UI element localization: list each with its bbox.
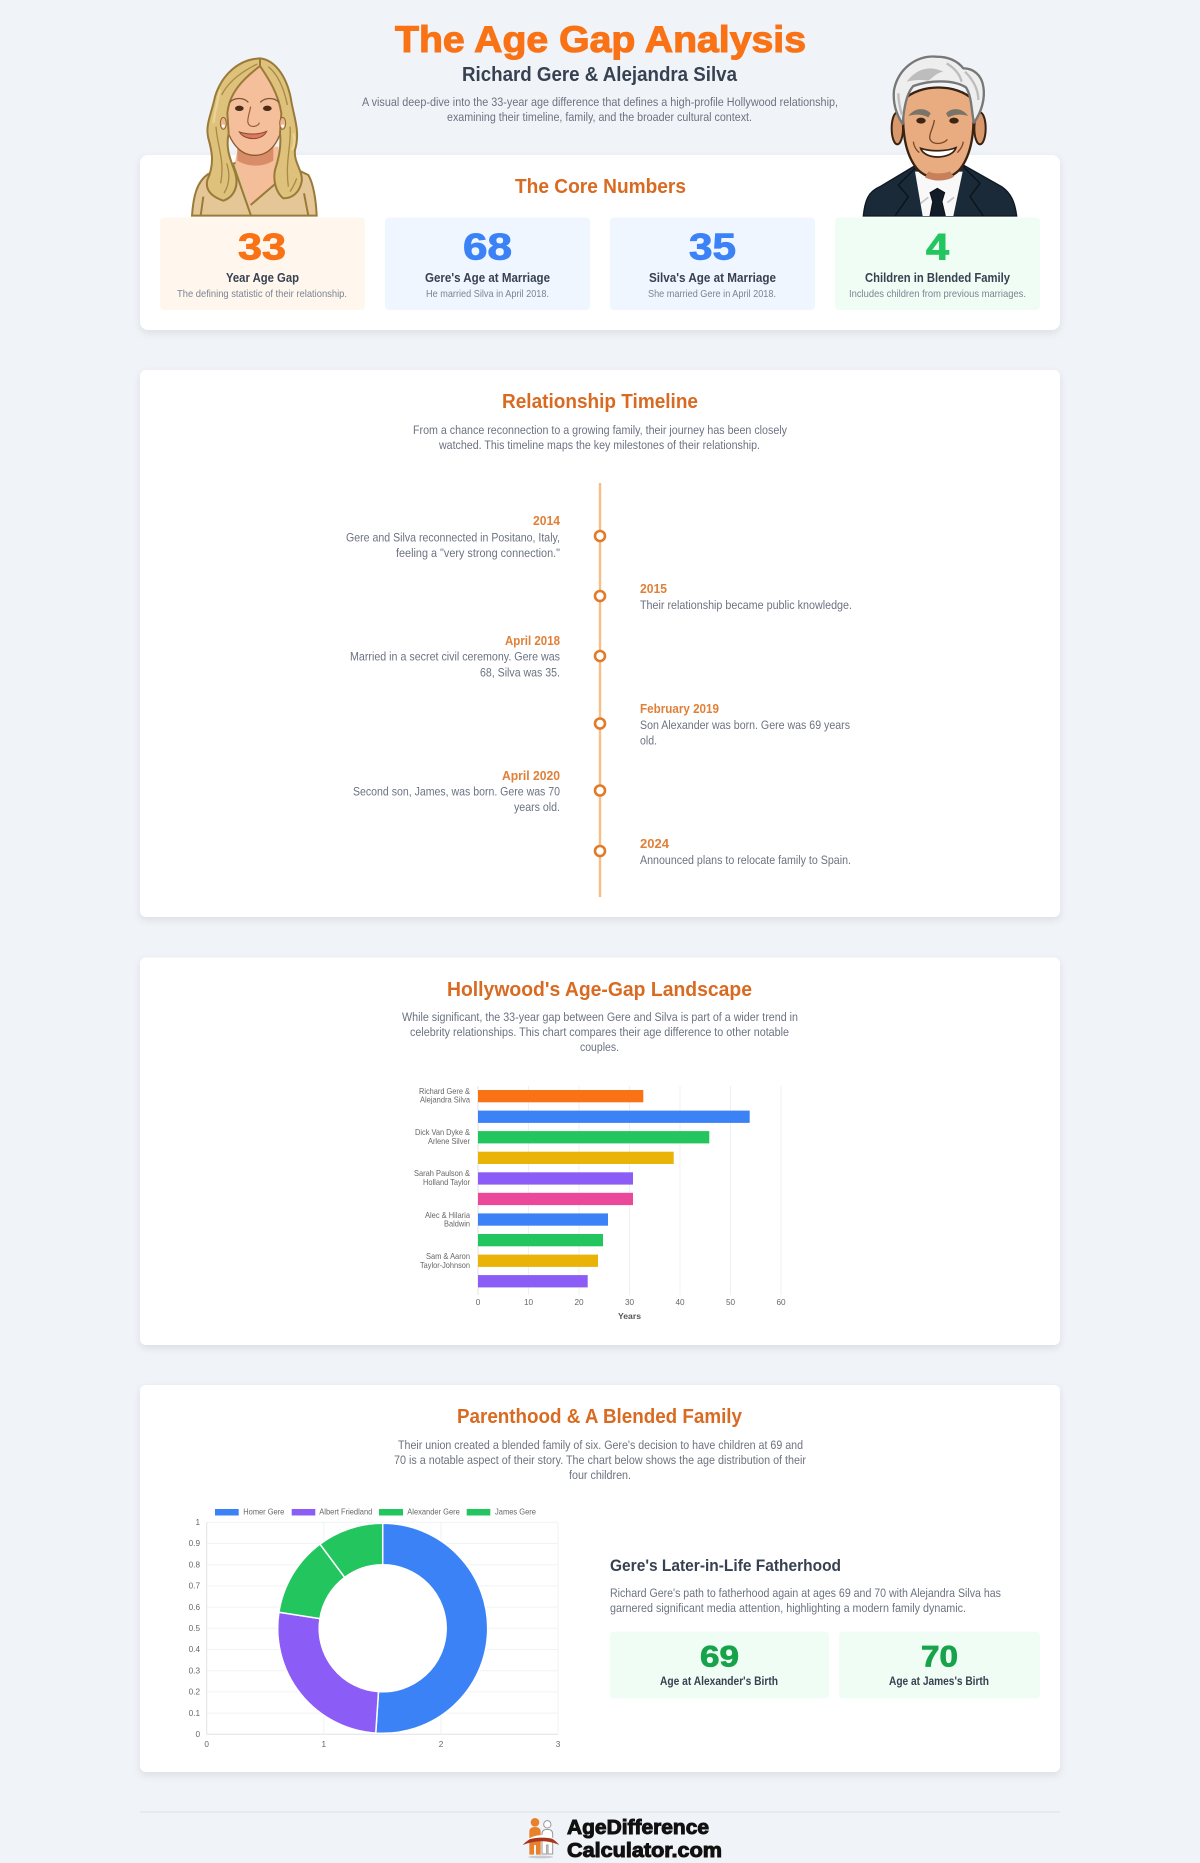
bar chart: age gaps: Sarah Paulson & [414, 1169, 470, 1178]
timeline intro text: watched. This timeline maps the key milestones of their relationship. [438, 438, 760, 452]
header description [362, 95, 838, 124]
donut chart: children ages: Alexander Gere [407, 1508, 460, 1516]
stat: age 69 [610, 1632, 829, 1698]
header description: A visual deep-dive into the 33-year age difference that defines a high-profile Hollywood relationship, [362, 95, 838, 109]
event: 2014 [346, 513, 561, 560]
bar chart: age gaps: Alec & Hilaria [425, 1211, 470, 1220]
event: 2014: feeling a "very strong connection." [396, 546, 560, 560]
fatherhood text: garnered significant media attention, highlighting a modern family dynamic. [610, 1601, 966, 1615]
event: 2014: 2014 [533, 513, 561, 528]
event: 2024: 2024 [640, 836, 670, 851]
donut chart: children ages: 0.9 [189, 1539, 200, 1548]
stat: age 70: Age at James's Birth [889, 1674, 989, 1688]
event: April 2020 [353, 768, 560, 814]
bar chart: age gaps [414, 1086, 786, 1321]
event: 2015: Their relationship became public knowledge. [640, 598, 852, 612]
bar chart: age gaps: Holland Taylor [423, 1178, 470, 1187]
bar chart: age gaps: Baldwin [444, 1220, 470, 1228]
stat: 4 children: Includes children from previous marriages. [849, 289, 1026, 300]
bar chart: age gaps: 20 [574, 1298, 584, 1307]
event: February 2019: February 2019 [640, 701, 719, 716]
parenthood intro text: four children. [569, 1468, 631, 1482]
donut chart: children ages: Albert Friedland [319, 1508, 373, 1516]
stat: 33 year age gap [160, 218, 365, 310]
donut chart: children ages: 0.5 [189, 1624, 200, 1633]
icon: calculator logo [523, 1818, 559, 1858]
stat: 33 year age gap: Year Age Gap [226, 270, 299, 285]
heading: relationship timeline: Relationship Timeline [502, 390, 698, 413]
stat: 68 gere's age: 68 [463, 226, 512, 268]
stat: 33 year age gap: 33 [238, 226, 286, 268]
stat: age 69: 69 [700, 1640, 739, 1674]
bar chart: age gaps: Sam & Aaron [426, 1252, 470, 1261]
heading: hollywood's age-gap landscape: Hollywood's Age-Gap Landscape [447, 978, 752, 1001]
event: April 2018: Married in a secret civil ceremony. Gere was [350, 650, 560, 664]
landscape intro text [402, 1010, 798, 1054]
logo wordmark: Calculator.com [567, 1839, 722, 1862]
bar chart: age gaps: 0 [476, 1298, 481, 1307]
icon: portrait of Alejandra Silva [192, 58, 317, 216]
landscape intro text: couples. [580, 1040, 619, 1054]
event: 2014: Gere and Silva reconnected in Positano, Italy, [346, 530, 560, 544]
footer [140, 1812, 1060, 1862]
event: April 2018 [350, 633, 560, 679]
parenthood intro text: Their union created a blended family of six. Gere's decision to have children at 69 and [398, 1438, 803, 1452]
donut chart: children ages: 0 [204, 1740, 209, 1749]
timeline axis [599, 483, 601, 897]
event: April 2018: 68, Silva was 35. [480, 665, 560, 679]
title: The Age Gap Analysis [395, 19, 806, 60]
stat: 4 children: Children in Blended Family [865, 270, 1011, 285]
stat: 68 gere's age: He married Silva in April 2018. [426, 289, 549, 300]
icon: portrait of Richard Gere [863, 57, 1017, 216]
header description: examining their timeline, family, and the broader cultural context. [447, 110, 752, 124]
donut chart: children ages: 0.4 [189, 1645, 200, 1654]
panel: hollywood landscape [140, 958, 1060, 1345]
stat: 35 silva's age: 35 [689, 226, 736, 268]
fatherhood text: Richard Gere's path to fatherhood again at ages 69 and 70 with Alejandra Silva has [610, 1586, 1001, 1600]
timeline intro text: From a chance reconnection to a growing family, their journey has been closely [413, 423, 788, 437]
donut chart: children ages: 2 [439, 1740, 444, 1749]
donut chart: children ages [189, 1508, 561, 1749]
event: April 2018: April 2018 [505, 633, 560, 648]
donut chart: children ages: 0.7 [189, 1582, 200, 1591]
stat: 4 children [835, 218, 1040, 310]
stat: 4 children: 4 [926, 226, 949, 268]
event: April 2020: Second son, James, was born. Gere was 70 [353, 784, 560, 798]
panel: relationship timeline [140, 370, 1060, 917]
bar chart: age gaps: Dick Van Dyke & [415, 1128, 470, 1137]
timeline intro text [413, 423, 788, 452]
event: 2024: Announced plans to relocate family to Spain. [640, 853, 851, 867]
bar chart: age gaps: 10 [524, 1298, 533, 1307]
donut chart: children ages: 0.6 [189, 1603, 200, 1612]
donut chart: children ages: 0.1 [189, 1709, 200, 1718]
fatherhood text [610, 1586, 1001, 1615]
donut chart: children ages: 1 [322, 1740, 327, 1749]
bar chart: age gaps: 50 [726, 1298, 735, 1307]
event: February 2019: Son Alexander was born. Gere was 69 years [640, 718, 850, 732]
stat: 35 silva's age [610, 218, 815, 310]
donut chart: children ages: 0 [195, 1730, 200, 1739]
stat: 68 gere's age: Gere's Age at Marriage [425, 270, 550, 285]
stat: 68 gere's age [385, 218, 590, 310]
stat: 35 silva's age: Silva's Age at Marriage [649, 270, 776, 285]
bar chart: age gaps: Years [618, 1311, 641, 1321]
donut chart: children ages: 1 [195, 1518, 200, 1527]
landscape intro text: While significant, the 33-year gap between Gere and Silva is part of a wider trend in [402, 1010, 798, 1024]
event: April 2020: years old. [514, 800, 560, 814]
subtitle: Richard Gere & Alejandra Silva [462, 64, 738, 86]
panel: parenthood and blended family [140, 1385, 1060, 1772]
event: 2024 [640, 836, 851, 867]
header [362, 19, 838, 124]
donut chart: children ages: 0.3 [189, 1666, 200, 1675]
logo wordmark: AgeDifference [567, 1816, 709, 1839]
timeline marker dots [595, 531, 605, 856]
event: February 2019: old. [640, 734, 657, 748]
heading: parenthood: Parenthood & A Blended Family [457, 1405, 743, 1428]
heading: later-in-life fatherhood: Gere's Later-in-Life Fatherhood [610, 1557, 841, 1575]
event: February 2019 [640, 701, 850, 748]
bar chart: age gaps: 40 [675, 1298, 685, 1307]
stat: age 70 [839, 1632, 1040, 1698]
bar chart: age gaps: Richard Gere & [419, 1087, 470, 1096]
parenthood intro text: 70 is a notable aspect of their story. The chart below shows the age distribution of their [394, 1453, 806, 1467]
parenthood intro text [394, 1438, 806, 1482]
event: 2015 [640, 581, 852, 612]
heading: core numbers: The Core Numbers [515, 175, 686, 198]
donut chart: children ages: 3 [556, 1740, 561, 1749]
stat: age 69: Age at Alexander's Birth [660, 1674, 778, 1688]
bar chart: age gaps: Alejandra Silva [420, 1096, 470, 1105]
stat: age 70: 70 [921, 1640, 958, 1674]
bar chart: age gaps: 30 [625, 1298, 634, 1307]
event: April 2020: April 2020 [502, 768, 560, 783]
panel: core numbers [140, 155, 1060, 330]
bar chart: age gaps: 60 [776, 1298, 786, 1307]
stat: 33 year age gap: The defining statistic of their relationship. [177, 289, 347, 300]
donut chart: children ages: James Gere [495, 1508, 536, 1516]
donut chart: children ages: Homer Gere [243, 1508, 285, 1516]
landscape intro text: celebrity relationships. This chart compares their age difference to other notable [410, 1025, 789, 1039]
donut chart: children ages: 0.2 [189, 1688, 200, 1697]
bar chart: age gaps: Arlene Silver [428, 1137, 470, 1146]
logo wordmark [567, 1816, 722, 1862]
stat: 35 silva's age: She married Gere in April 2018. [648, 289, 776, 300]
event: 2015: 2015 [640, 581, 667, 596]
donut chart: children ages: 0.8 [189, 1560, 200, 1569]
bar chart: age gaps: Taylor-Johnson [420, 1261, 470, 1270]
